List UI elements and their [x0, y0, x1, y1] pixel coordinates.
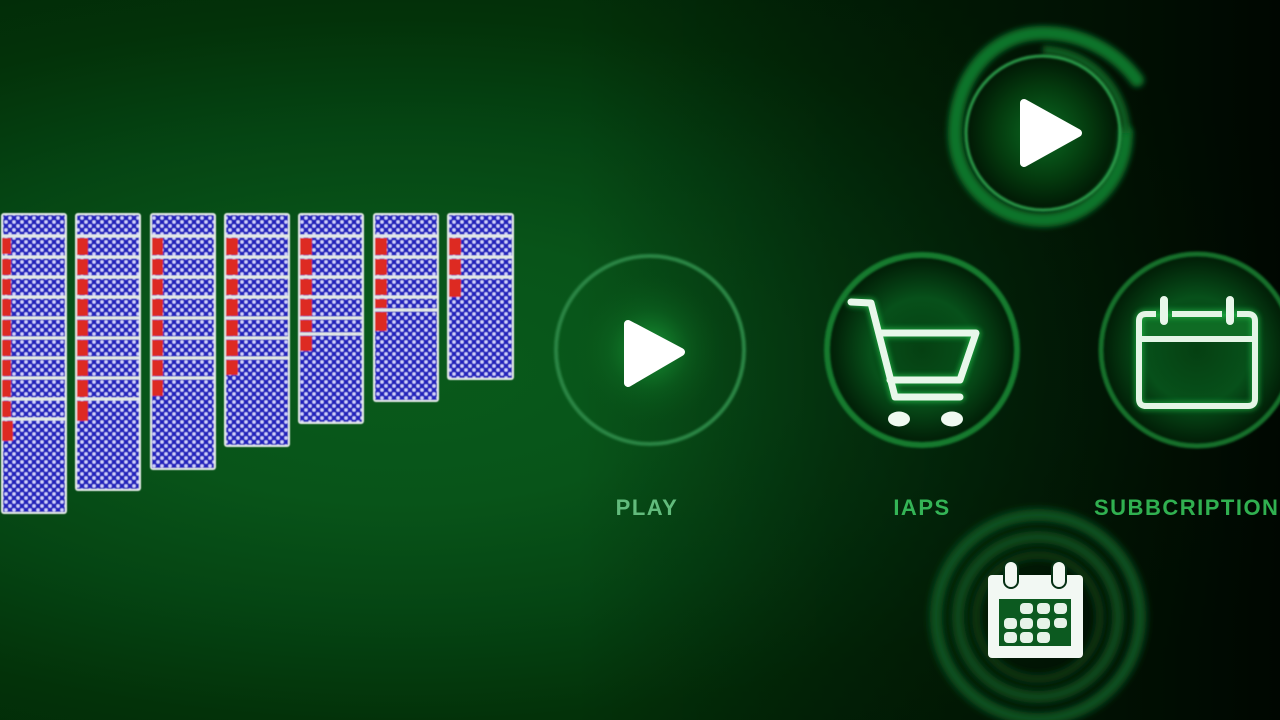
card column 5 [298, 213, 364, 424]
icon: outline calendar [1139, 300, 1255, 406]
icon: play triangle [628, 324, 681, 383]
card column 3 [150, 213, 216, 470]
top play button with spiral rings [955, 33, 1137, 220]
play button with ring [556, 256, 744, 444]
subscription button with ring [1101, 254, 1280, 446]
card column 1 [1, 213, 67, 514]
card column 6 [373, 213, 439, 402]
icon: shopping cart [851, 302, 976, 426]
icon: top play triangle [1024, 103, 1078, 163]
label: play: PLAY [616, 495, 678, 520]
card column 4 [224, 213, 290, 447]
bottom calendar button with rings [936, 515, 1140, 719]
icon: filled calendar [988, 568, 1083, 658]
iaps button with ring [827, 255, 1017, 445]
card column 7 [447, 213, 514, 380]
label: subscription: SUBBCRIPTION [1094, 495, 1279, 520]
card column 2 [75, 213, 141, 491]
label: iaps: IAPS [893, 495, 951, 520]
